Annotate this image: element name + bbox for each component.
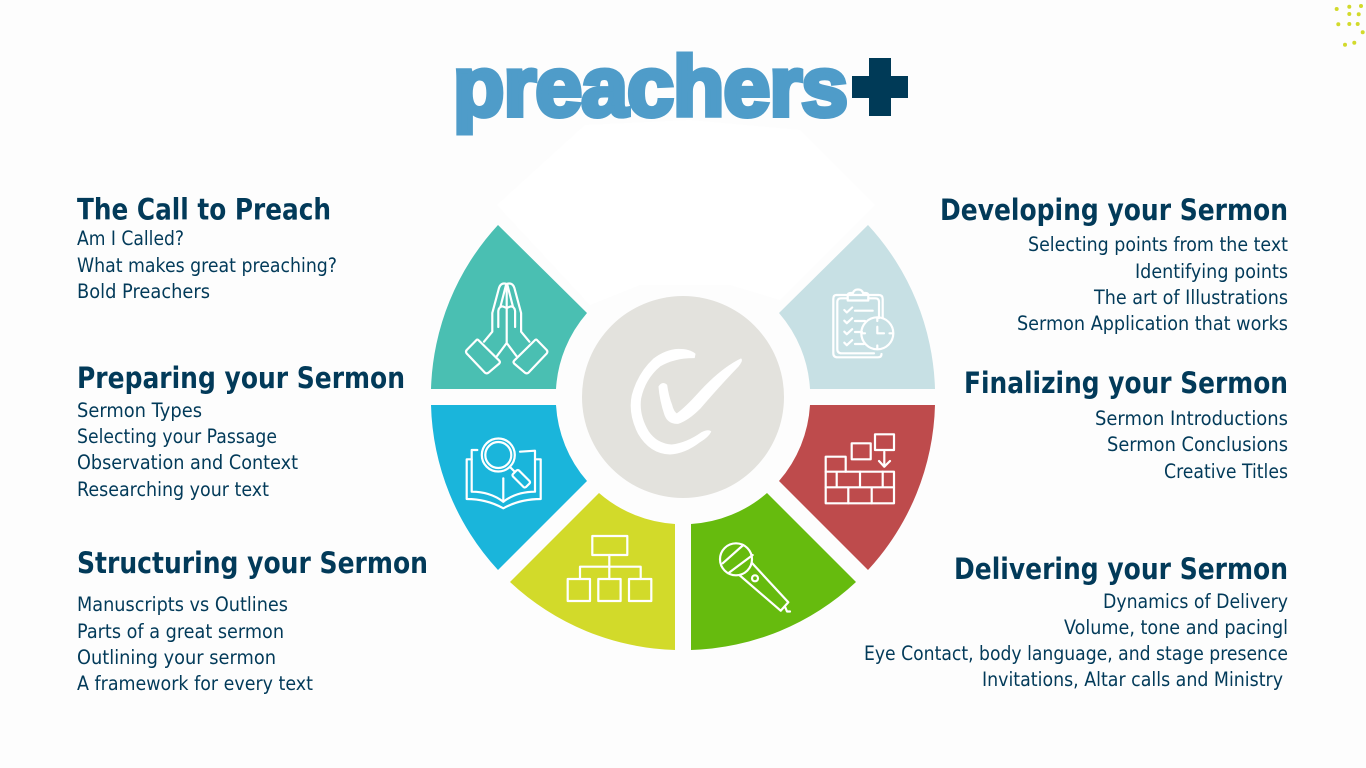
heading: The Call to Preach [77, 192, 331, 226]
panel: Developing your Sermon [940, 193, 1288, 335]
list: The art of Illustrations [1093, 286, 1288, 309]
list: Selecting your Passage [77, 425, 277, 448]
panel: The Call to Preach [77, 192, 337, 303]
segment: yellow, org chart [510, 493, 675, 650]
list: Dynamics of Delivery [1103, 590, 1288, 613]
icon: praying hands [466, 284, 547, 373]
list: Observation and Context [77, 451, 298, 474]
list: Bold Preachers [77, 280, 210, 303]
heading: Delivering your Sermon [954, 552, 1288, 586]
list: Researching your text [77, 478, 269, 501]
icon: microphone [720, 543, 790, 612]
panel: Delivering your Sermon [864, 552, 1288, 691]
icon: clipboard and clock [833, 290, 893, 357]
list: Identifying points [1135, 260, 1288, 283]
list: Manuscripts vs Outlines [77, 593, 288, 616]
heading: Developing your Sermon [940, 193, 1288, 227]
list: A framework for every text [77, 672, 313, 695]
center circle with check mark [582, 296, 784, 498]
segment: green, microphone [691, 493, 856, 650]
heading: Finalizing your Sermon [964, 366, 1288, 400]
list [77, 227, 337, 303]
icon: hand-drawn check [631, 349, 741, 454]
list: Sermon Types [77, 399, 202, 422]
list: Invitations, Altar calls and Ministry [982, 668, 1283, 691]
icon: org chart [568, 536, 651, 601]
icon: brick wall [826, 434, 894, 503]
list: Am I Called? [77, 227, 184, 250]
list: Sermon Introductions [1095, 407, 1288, 430]
logo wordmark: preachers [453, 40, 848, 134]
list: Volume, tone and pacingl [1064, 616, 1288, 639]
list [77, 593, 313, 695]
list: Parts of a great sermon [77, 620, 284, 643]
segment: blue, book and magnifier [431, 405, 587, 570]
heading: Preparing your Sermon [77, 361, 405, 395]
panel: Preparing your Sermon [77, 361, 405, 501]
segment: light blue, clipboard and clock [779, 225, 935, 389]
list: Eye Contact, body language, and stage presence [864, 642, 1288, 665]
logo plus sign [852, 58, 908, 116]
segment: teal, praying hands [431, 225, 587, 389]
logo: preachers+ [453, 40, 908, 134]
heading: Structuring your Sermon [77, 546, 428, 580]
list: Sermon Application that works [1017, 312, 1288, 335]
list [77, 399, 298, 501]
segment: red, brick wall [779, 405, 935, 570]
list: Sermon Conclusions [1107, 433, 1288, 456]
list: What makes great preaching? [77, 254, 337, 277]
icon: book and magnifier [467, 438, 541, 508]
decorative dots top right [1335, 4, 1365, 47]
list [1095, 407, 1288, 483]
panel: Structuring your Sermon [77, 546, 428, 695]
list: Outlining your sermon [77, 646, 276, 669]
list: Selecting points from the text [1028, 233, 1288, 256]
list [864, 590, 1288, 691]
list [1017, 233, 1288, 335]
list: Creative Titles [1164, 460, 1288, 483]
panel: Finalizing your Sermon [964, 366, 1288, 483]
